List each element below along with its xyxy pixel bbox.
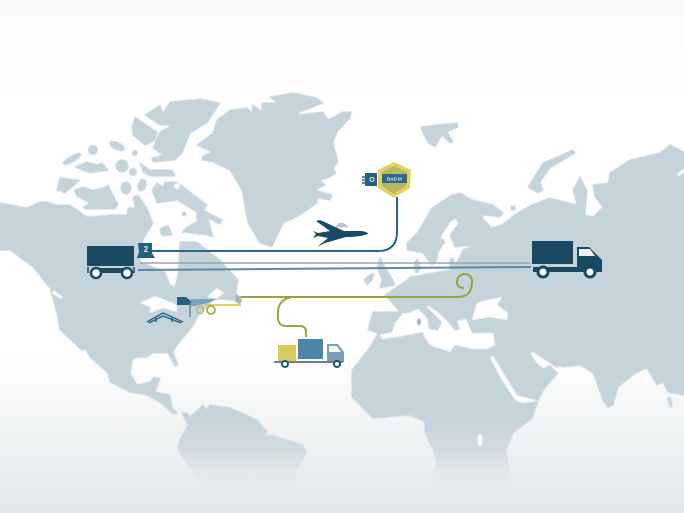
Pacific coast sliver [53,292,62,298]
icon: left truck [87,246,134,278]
icon: coil pair [196,306,215,314]
icon: numbered depot badge [137,243,155,258]
Hudson island hole [174,183,180,189]
icon: small port plane [177,297,217,317]
icon: delivery truck [274,339,344,367]
Mediterranean Sea [380,305,495,352]
route: green branch to delivery truck [278,297,306,337]
icon: plane [313,220,368,247]
Persian Gulf [530,352,560,373]
Siberian inlet [678,170,684,175]
Saint Lawrence gulf [207,288,224,299]
icon: coast waypoint [235,295,242,304]
icon: shield badge: BAD III [387,176,402,182]
icon: dome above plane [336,223,348,227]
route: yellow connector [205,299,240,305]
icon: numbered depot badge: 2 [144,245,149,254]
landmass: South America [178,405,306,513]
icon: plug connector [362,173,377,186]
Mediterranean islands [417,318,421,326]
East Africa lake [478,434,482,446]
landmass: European islands [364,123,673,407]
landmass: Canadian Arctic islands [57,99,222,237]
icon: right truck [532,241,602,277]
route: green line with loop [240,274,472,297]
icon: shield badge [378,162,411,198]
route: grey line [140,262,531,264]
Black Sea [472,297,508,320]
landmass: North and Central America [0,195,240,414]
route: blue lower line [138,267,531,270]
Red Sea and Gulf of Aden [490,356,538,403]
landmass: Eurasia and Africa [352,145,684,500]
landmass: Greenland [197,93,351,247]
route: blue line to shield [150,197,397,251]
icon: bridge arch [147,313,183,323]
seas and lakes [53,170,684,446]
Great Lakes [140,296,177,313]
Gulf of California [84,350,96,371]
